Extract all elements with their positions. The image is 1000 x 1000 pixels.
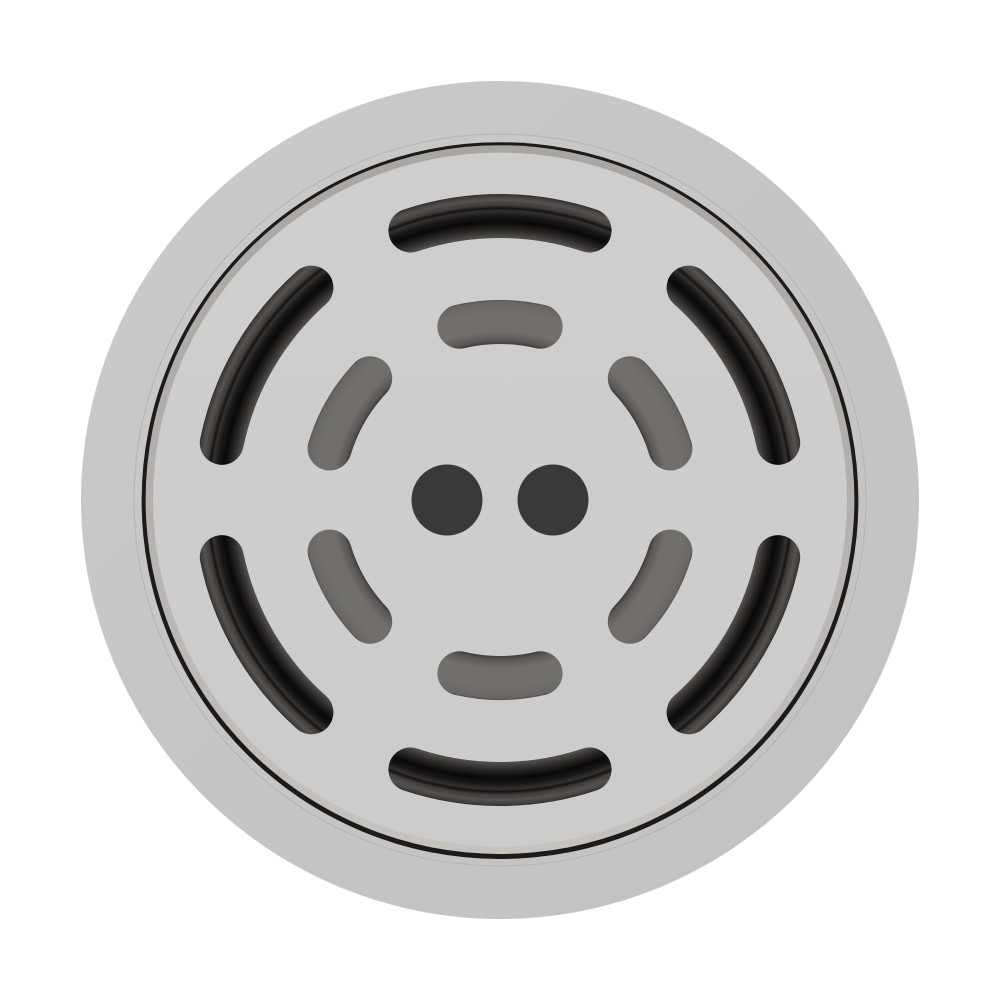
centre hole: left	[412, 464, 482, 536]
centre hole: right	[518, 464, 588, 536]
inner slot: top	[459, 322, 541, 327]
plate bevel	[146, 145, 854, 854]
outer flange ring	[81, 81, 919, 919]
fine outer line on flange	[134, 134, 866, 866]
outer slot: bottom	[410, 770, 590, 784]
dark groove around plate	[142, 142, 858, 859]
centre plate	[153, 153, 847, 847]
outer slot: upper right	[689, 280, 791, 443]
inner slot: lower right	[630, 551, 674, 624]
inner slot: lower left	[326, 551, 370, 624]
outer slots	[209, 216, 791, 784]
outer slot: lower right	[689, 557, 791, 720]
outer slot: lower left	[209, 557, 311, 720]
inner slots	[326, 322, 674, 678]
inner slot: bottom	[459, 673, 541, 678]
outer slot: top	[410, 216, 590, 230]
inner slot: upper left	[326, 376, 370, 449]
inner slot: upper right	[630, 376, 674, 449]
outer slot: upper left	[209, 280, 311, 443]
